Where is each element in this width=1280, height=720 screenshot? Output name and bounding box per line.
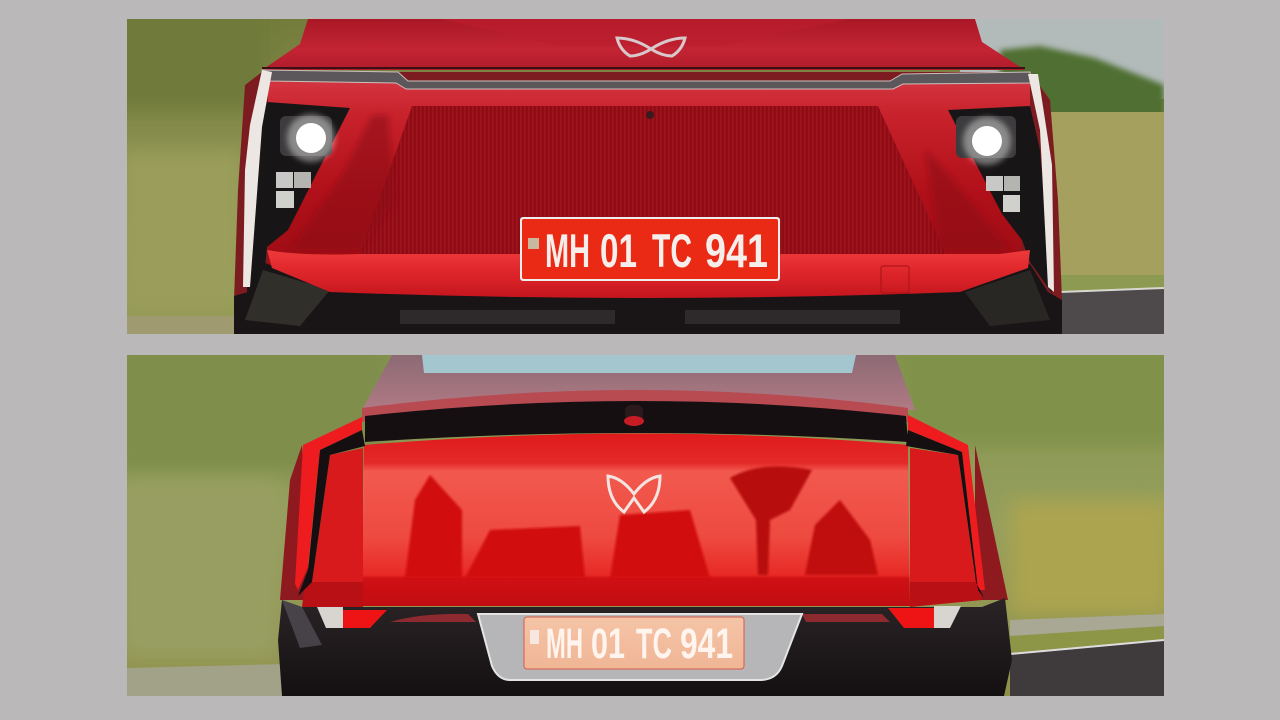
photo: front view of red car <box>100 0 1164 334</box>
number plate: front: 941 <box>705 224 768 277</box>
camera <box>624 405 644 426</box>
reflections on body panel <box>290 115 1010 250</box>
headlight: right <box>948 74 1054 293</box>
spoiler: lip and black band <box>362 390 908 442</box>
small details: sensor and tow cover <box>646 111 909 293</box>
number plate surround <box>478 614 802 680</box>
car: boot lid <box>302 434 982 607</box>
number plate: rear: 01 <box>591 620 625 668</box>
car: black lower bumper <box>278 598 1012 696</box>
number plate: front: 01 <box>600 224 637 277</box>
light: right tail blade <box>906 415 985 598</box>
car: black lower bumper <box>234 262 1062 334</box>
icon: hood logo <box>617 38 685 56</box>
car: outer body sides <box>280 445 1008 600</box>
car: roof and rear glass <box>362 355 915 410</box>
number plate: rear <box>524 617 744 669</box>
number plate: front <box>520 217 780 281</box>
grille: ribbed centre panel <box>360 106 946 254</box>
background: grass field and road <box>110 345 1180 696</box>
light: left tail blade <box>295 417 365 596</box>
car: hood <box>262 19 1025 70</box>
car: front body panel <box>234 72 1062 300</box>
number plate: rear: MH <box>546 620 583 668</box>
reflection: trees on boot lid <box>405 466 878 578</box>
light bar: upper trim <box>262 70 1032 89</box>
background: grass bank, trees and sky <box>100 0 1164 334</box>
car: red lower lip <box>267 250 1030 298</box>
number plate: rear: 941 <box>680 620 733 668</box>
photo: rear view of red car <box>110 345 1180 696</box>
headlight: left <box>243 70 350 293</box>
number plate: front: TC <box>652 224 692 277</box>
number plate: front: MH <box>545 224 590 277</box>
icon: boot logo <box>608 476 660 512</box>
tail lamps: lower left and right <box>317 606 961 628</box>
number plate: rear: TC <box>636 620 672 668</box>
